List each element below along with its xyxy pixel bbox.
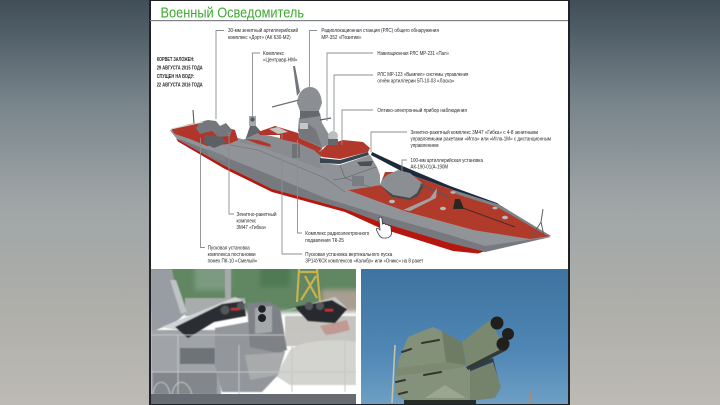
dome base	[300, 111, 320, 119]
hatch handles	[396, 340, 441, 394]
callout labels: комплекс «Дорт» (АК 630-М2)	[228, 35, 291, 41]
tower white unit	[300, 123, 308, 129]
launch dates text: СПУЩЕН НА ВОДУ:	[157, 74, 195, 80]
dark inner block	[466, 358, 498, 378]
callout labels: «Центравр-НМ»	[263, 58, 298, 64]
side red strip	[245, 139, 271, 147]
bow mast	[531, 209, 544, 238]
bridge roof red	[310, 140, 370, 159]
callout labels: управлением	[410, 143, 439, 149]
callout labels: комплекса постановки	[208, 252, 256, 258]
distant lamp	[530, 391, 532, 404]
stern flagstaff	[193, 110, 194, 124]
tower	[298, 113, 334, 148]
left launcher	[162, 297, 246, 338]
page panel	[149, 0, 570, 405]
muzzle cluster	[490, 316, 514, 350]
callout labels: подавления ТК-25	[305, 238, 344, 244]
midship red deck	[258, 126, 322, 152]
photo: missile launcher	[151, 262, 362, 404]
anchor capstan	[453, 199, 464, 209]
railings	[151, 335, 356, 395]
gun turret dark edge	[380, 183, 424, 200]
turret right facet	[442, 331, 466, 365]
turret lower block	[468, 362, 501, 401]
aft rail	[171, 122, 203, 129]
turret lower facet	[395, 366, 470, 401]
photo: gun turret	[361, 269, 568, 404]
background white tanks	[276, 316, 356, 385]
centaur mast	[245, 116, 263, 141]
housing underside	[466, 350, 507, 370]
lower deck	[151, 394, 356, 404]
foredeck	[348, 172, 551, 239]
launch dates text	[157, 57, 203, 88]
wing gun	[357, 161, 373, 166]
aft deck	[171, 122, 238, 146]
callout labels: Комплекс радиоэлектронного	[305, 231, 369, 237]
waterline red strip	[176, 138, 484, 254]
callout labels: АК-190-01(А-190М	[410, 165, 448, 171]
turret upper facet	[398, 327, 442, 362]
crane	[297, 269, 320, 302]
left structure	[151, 269, 231, 400]
midship superstructure	[238, 133, 325, 170]
side door	[292, 144, 300, 158]
leader lines	[200, 30, 407, 254]
corvette illustration	[170, 66, 551, 254]
callout labels: ЗР14УКСК комплексов «Калибр» или «Оникс» на 8 ракет	[305, 258, 424, 264]
far deck rim	[450, 190, 551, 236]
anchor chain	[463, 208, 515, 227]
superstructure door	[352, 176, 364, 186]
callout labels: управляемыми ракетами «Игла» или «Игла-1М» с дистанционным	[410, 136, 551, 142]
hull lower band	[177, 139, 549, 252]
launch dates text: КОРВЕТ ЗАЛОЖЕН:	[157, 57, 195, 63]
callout labels: Навигационная РЛС МР-231 «Пал»	[377, 51, 449, 57]
hull side	[170, 130, 551, 252]
callout labels	[208, 27, 551, 264]
breakwater	[403, 188, 437, 211]
callout labels: МР-352 «Позитив»	[321, 35, 362, 41]
tower shaded side	[298, 122, 322, 147]
forward gun turret	[380, 170, 422, 198]
title bar	[150, 1, 568, 22]
callout labels: комплекс	[236, 219, 257, 225]
bottom edge	[149, 404, 570, 405]
forward superstructure	[320, 155, 380, 190]
hillside backdrop	[151, 262, 362, 312]
launcher hatch	[269, 127, 288, 134]
yard arm	[272, 100, 299, 107]
callout labels: Радиолокационная станция (РЛС) общего обнаружения	[321, 28, 439, 34]
callout labels: Зенитно-ракетный комплекс 3М47 «Гибка» с 4-8 зенитными	[410, 129, 538, 136]
side launcher box	[207, 149, 225, 162]
forward superstructure facets	[333, 165, 376, 187]
callout labels: помех ПК-10 «Смелый»	[208, 258, 257, 264]
launch dates text: 22 АВГУСТА 2016 ГОДА	[157, 82, 203, 88]
launch dates text: 29 АВГУСТА 2015 ГОДА	[157, 66, 203, 72]
aft gun mount	[204, 135, 226, 148]
turret body	[395, 327, 465, 400]
bridge windows band	[320, 152, 369, 164]
callout labels: Пусковая установка	[208, 246, 250, 252]
icon: hand cursor	[376, 217, 392, 238]
gun housing	[462, 320, 500, 366]
callout labels: 100-мм артиллерийская установка	[410, 157, 483, 164]
callout labels: огнём артиллерии 5П-10-03 «Ласка»	[377, 78, 455, 84]
sensor tower and base	[215, 302, 287, 392]
title: Военный Осведомитель	[160, 6, 304, 22]
far bulwark	[371, 152, 500, 205]
tower arm	[320, 118, 331, 120]
callout labels: Комплекс	[263, 51, 284, 57]
gun barrel	[420, 184, 450, 198]
deck hatches	[389, 191, 508, 219]
callout labels: РЛС МР-123 «Вымпел» системы управления	[377, 72, 469, 78]
mast	[293, 66, 300, 96]
aft deck equipment	[196, 120, 232, 137]
sensor lenses	[258, 305, 266, 322]
callout labels: Зенитно-ракетный	[236, 211, 277, 218]
turret lower bright facet	[425, 385, 466, 398]
callout labels: 30-мм зенитный артиллерийский	[228, 27, 298, 34]
turret base ring	[404, 400, 476, 404]
optronic dome	[328, 131, 338, 145]
callout labels: Пусковая установка вертикального пуска	[305, 252, 392, 258]
callout labels: 3М47 «Гибка»	[236, 225, 266, 231]
light haze	[185, 298, 245, 316]
callout labels: Оптико-электронный прибор наблюдения	[377, 107, 467, 114]
radar dome positive	[297, 87, 322, 111]
hull sheer line	[230, 145, 345, 192]
sky	[361, 269, 568, 404]
post	[392, 345, 395, 403]
right launcher	[280, 297, 347, 323]
